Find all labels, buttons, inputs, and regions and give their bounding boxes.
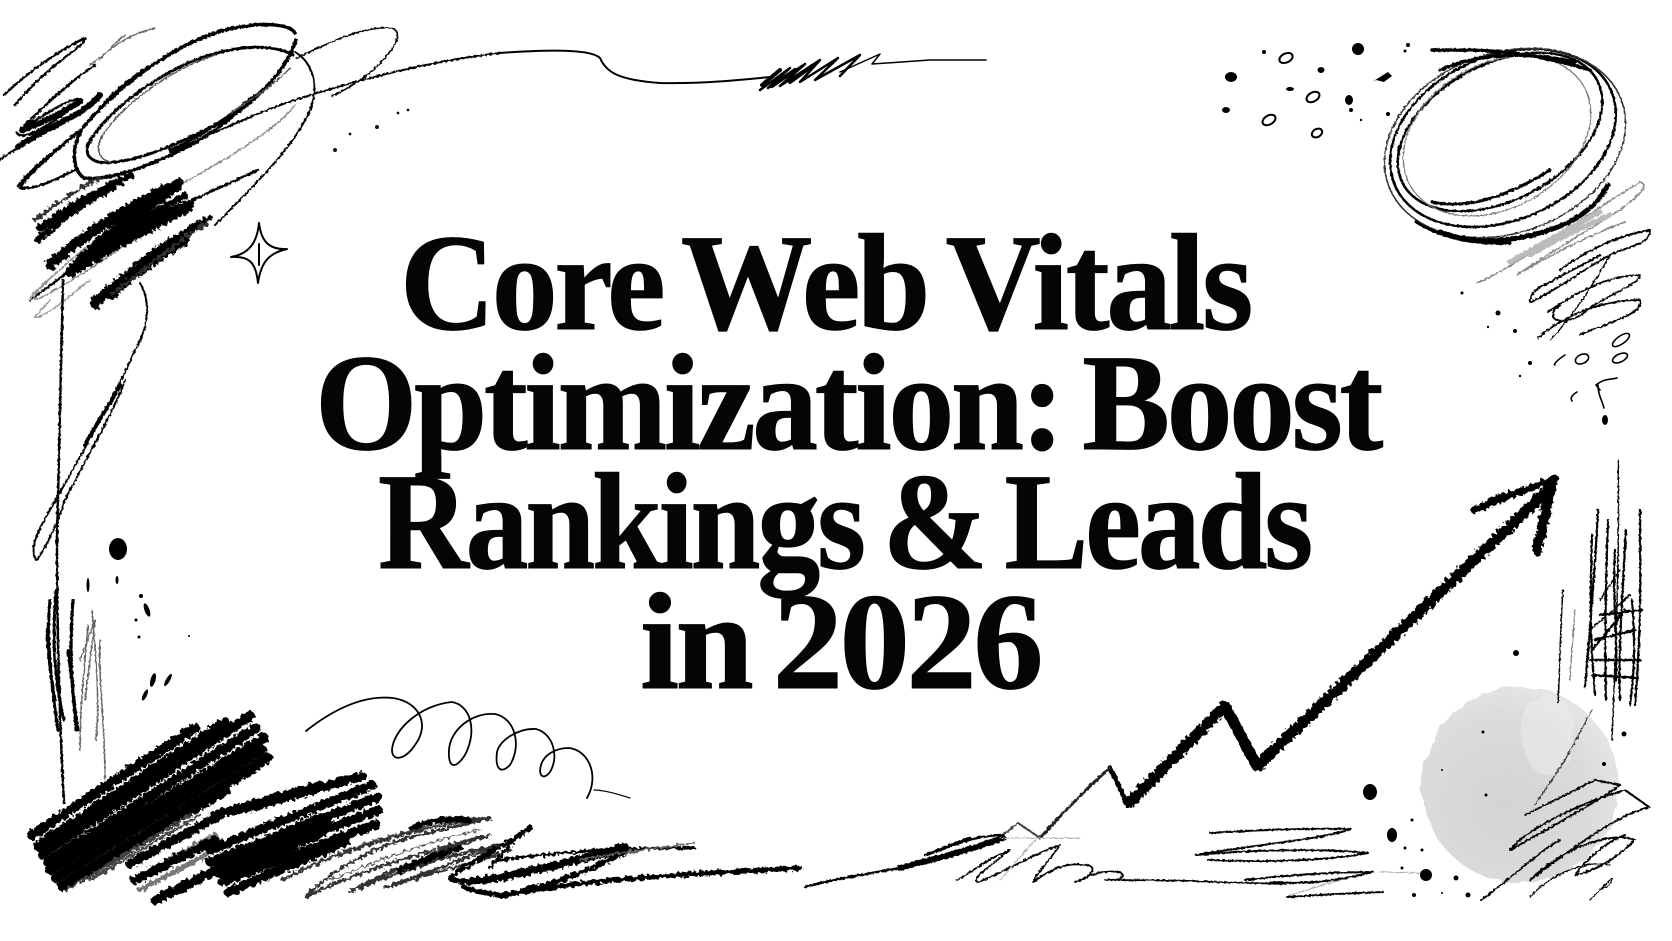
title: Optimization: Boost: [315, 326, 1383, 479]
small ink dots top-left: [333, 109, 409, 152]
right hatch loops under the ring: [1477, 182, 1650, 340]
title: Rankings & Leads: [378, 445, 1311, 598]
spiral squiggle: [306, 698, 630, 798]
scribble over the circle: [1481, 710, 1649, 900]
left vertical strokes and loop: [34, 280, 147, 803]
top right dots and small ovals: [1222, 43, 1410, 139]
icon: four point star sparkle: [231, 223, 287, 283]
vertical hatch scribble right: [1558, 460, 1642, 740]
top wavy line with zigzag: [500, 51, 986, 90]
title: Core Web Vitals: [400, 206, 1251, 359]
title: in 2026: [640, 565, 1040, 718]
rising zigzag arrow: [805, 478, 1555, 887]
grey watercolor circle: [1422, 687, 1618, 883]
title: [315, 206, 1383, 718]
top right ring scribble: [1358, 15, 1652, 270]
top-left scribble with loops: [0, 25, 500, 318]
scrawl wiggle along the bottom: [957, 838, 1285, 884]
small marks below right hatching: [1460, 292, 1631, 425]
ink splatter left: [86, 538, 190, 701]
ink splatter bottom right: [1363, 650, 1626, 898]
lighter hatching and thick line along the bottom: [282, 818, 800, 897]
heavy black scribble bottom-left: [32, 716, 378, 900]
horizontal scribble bottom right: [1196, 829, 1420, 897]
